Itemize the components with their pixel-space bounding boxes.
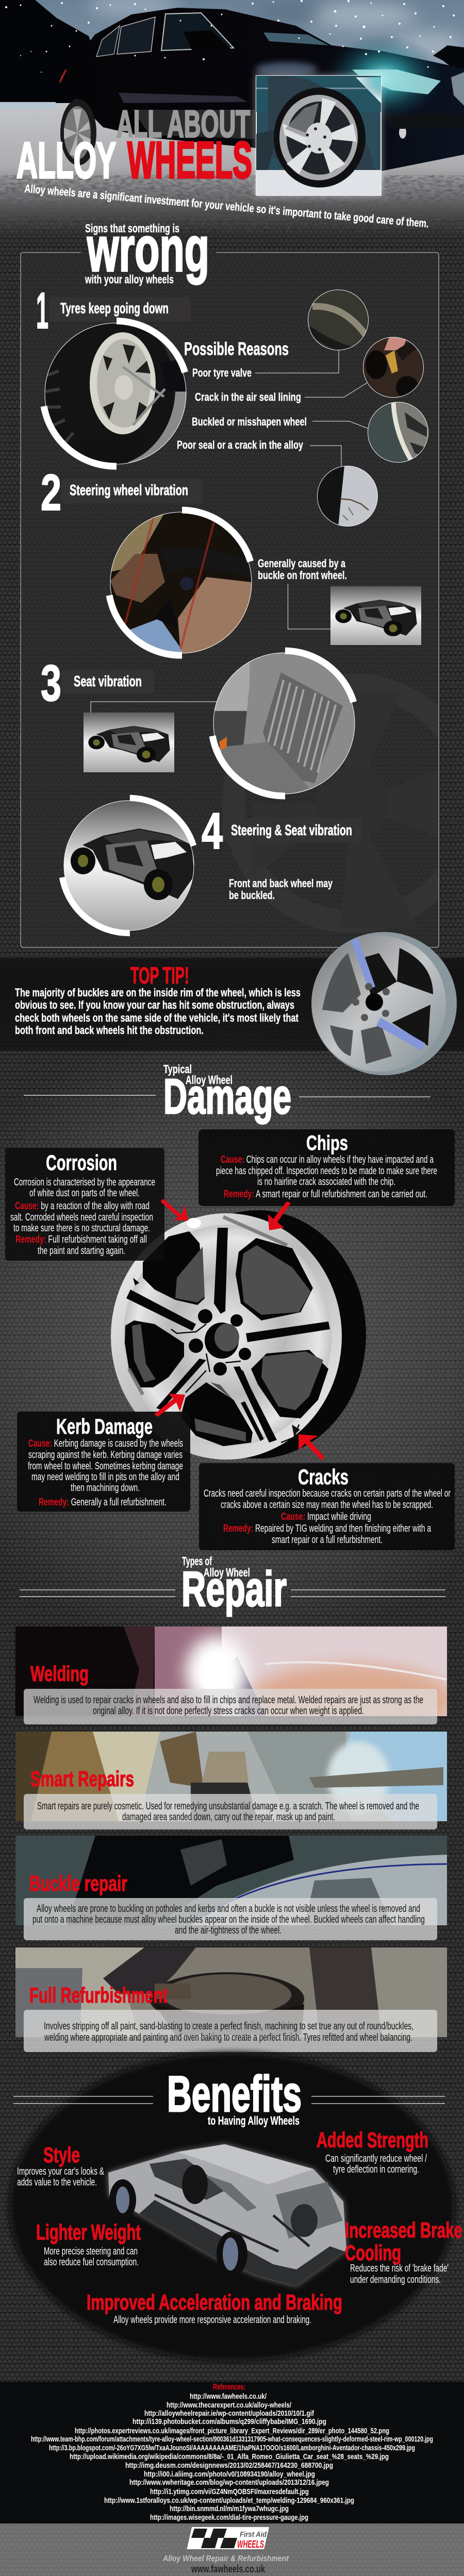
photo: chassis front	[330, 586, 421, 645]
photo: chassis seat	[84, 713, 174, 772]
references list: http://www.1stforalloys.co.uk/wp-content/uploads/et_temp/welding-129684_960x361.jpg	[104, 2496, 354, 2505]
photo: hands on steering wheel	[110, 512, 253, 653]
callout: cracks	[199, 1463, 455, 1550]
smart repairs text box	[24, 1794, 437, 1829]
panel: references	[0, 2382, 464, 2523]
callout: corrosion: to make sure there is no structural damage.	[13, 1223, 150, 1234]
front of car: fog lamp and grille	[382, 72, 464, 139]
headlight	[352, 70, 441, 94]
callout: chips: is no hairline crack associated with the chip.	[257, 1176, 395, 1188]
white arcs	[109, 510, 251, 655]
photo: tyre valve close-up circles	[308, 290, 430, 527]
benefit: improved acceleration and braking: Alloy wheels provide more responsive acceleration and braking.	[113, 2314, 311, 2326]
references list	[31, 2392, 433, 2522]
reasons list with leader lines: Crack in the air seal lining	[195, 391, 301, 403]
footer tagline: Alloy Wheel Repair & Refurbishment	[162, 2554, 289, 2563]
dark disc behind benefits	[9, 2052, 455, 2361]
buckle repair photo	[15, 1836, 447, 1925]
callout: corrosion: the paint and starting again.	[38, 1245, 125, 1257]
step 2 number: 2	[41, 464, 61, 521]
reasons list with leader lines	[177, 350, 369, 466]
benefit: improved acceleration and braking: Improved Acceleration and Braking	[87, 2290, 342, 2314]
callout: corrosion	[5, 1148, 164, 1261]
buckle repair text	[32, 1903, 425, 1936]
arrow: chips	[268, 1201, 291, 1230]
callout: kerb damage: may need welding to fill in pits on the alloy and	[31, 1471, 179, 1483]
callout: kerb damage: from wheel to wheel. Sometimes kerbing damage	[28, 1461, 183, 1472]
callout: kerb damage: Remedy: Generally a full refurbishment.	[39, 1497, 167, 1508]
top tip text: The majority of buckles are on the inside rim of the wheel, which is less	[15, 986, 301, 999]
buckle repair text: and the air-tightness of the wheel.	[175, 1925, 281, 1936]
benefit: style	[17, 2143, 104, 2188]
welding text	[34, 1694, 423, 1717]
step 4 note: be buckled.	[229, 889, 275, 902]
benefit: added strength	[317, 2128, 428, 2175]
step 1 label bar	[49, 297, 191, 321]
callout: corrosion: Corrosion	[46, 1150, 117, 1175]
step 1: tyres keep going down: 1	[36, 282, 48, 339]
references list: http://images.wisegeek.com/dial-tire-pressure-gauge.jpg	[150, 2513, 308, 2522]
callout: cracks: smart repair or a full refurbishment.	[272, 1534, 383, 1546]
step 2 note	[258, 557, 347, 629]
welding photo	[15, 1626, 447, 1716]
reasons list with leader lines: Poor tyre valve	[192, 366, 252, 379]
black window surrounds	[125, 1231, 328, 1446]
callout: cracks: Cracks	[298, 1465, 349, 1489]
step 3 title: Seat vibration	[74, 673, 142, 690]
reasons list with leader lines: Buckled or misshapen wheel	[192, 415, 307, 428]
buckle repair heading: Buckle repair	[29, 1871, 127, 1895]
cracks	[171, 1324, 299, 1443]
rim scratches	[129, 1217, 287, 1395]
benefit: style: Improves your car's looks &	[17, 2166, 104, 2177]
step 2 title: Steering wheel vibration	[70, 482, 188, 499]
callout: kerb damage: scraping against the kerb. Kerbing damage varies	[28, 1449, 183, 1461]
heading: benefits: to Having Alloy Wheels	[208, 2114, 300, 2127]
step 4 note	[229, 877, 333, 902]
white arcs	[212, 651, 354, 796]
full refurbishment photo	[15, 1947, 447, 2037]
spoke stripes	[126, 1228, 330, 1443]
callout: corrosion: salt. Corroded wheels need careful inspection	[10, 1212, 153, 1223]
heading: types of alloy wheel repair: Types of	[182, 1554, 212, 1568]
references list: http://bin.snmmd.nl/m/m1fywa7whugc.jpg	[170, 2504, 289, 2513]
heading: typical alloy wheel damage: Alloy Wheel	[186, 1073, 233, 1087]
welding heading: Welding	[30, 1662, 89, 1686]
panel: buckle repair	[15, 1836, 447, 1940]
benefit: added strength: tyre deflection in cornering.	[333, 2164, 419, 2175]
photo: full chassis	[63, 801, 195, 930]
lit backdrop behind damage wheel	[0, 1020, 464, 1659]
smart repairs photo	[15, 1732, 447, 1821]
panel: welding	[15, 1626, 447, 1724]
heading: typical alloy wheel damage: Damage	[163, 1069, 291, 1124]
callout: corrosion: of white dust on parts of the wheel.	[29, 1188, 140, 1199]
panel: full refurbishment	[15, 1947, 447, 2052]
ghost wheel behind panel	[234, 685, 464, 927]
references list: http://alloywheelrepair.ie/wp-content/uploads/2010/10/1.gif	[144, 2409, 314, 2418]
hero: car photo in the snow	[0, 0, 464, 245]
callout: chips	[198, 1129, 455, 1206]
heading: types of alloy wheel repair: Alloy Wheel	[204, 1566, 250, 1579]
callout: corrosion: Cause: by a reaction of the alloy with road	[15, 1200, 150, 1212]
see-through window parts	[132, 1245, 323, 1442]
heading: signs something is wrong	[85, 214, 209, 286]
footer band	[0, 2523, 464, 2576]
benefit: lighter weight: Lighter Weight	[36, 2220, 141, 2244]
callout: cracks: Cause: Impact while driving	[281, 1511, 371, 1522]
callout: kerb damage: Kerb Damage	[56, 1414, 153, 1438]
step 4 note: Front and back wheel may	[229, 877, 333, 890]
photo: flat tyre	[45, 324, 186, 464]
arrow: kerb damage	[154, 1394, 185, 1417]
benefit: lighter weight: also reduce fuel consumption.	[44, 2257, 139, 2268]
benefit: lighter weight	[36, 2220, 141, 2268]
callout: kerb damage: Cause: Kerbing damage is caused by the wheels	[28, 1438, 183, 1449]
heading: types of alloy wheel repair	[20, 1554, 445, 1617]
smart repairs heading: Smart Repairs	[30, 1767, 134, 1791]
reasons list with leader lines: Poor seal or a crack in the alloy	[177, 438, 304, 451]
callout: kerb damage	[17, 1412, 190, 1512]
benefit: style: adds value to the vehicle.	[17, 2177, 97, 2188]
heading: benefits	[13, 2065, 445, 2127]
top tip wheel	[311, 932, 457, 1075]
references list: http://img.deusm.com/designnews/2013/02/258467/164230_688700.jpg	[125, 2461, 333, 2470]
bolt holes and bore	[189, 1309, 251, 1376]
panel: signs something is wrong	[21, 252, 464, 947]
benefit: style: Style	[43, 2143, 80, 2167]
references list: http://www.thecarexpert.co.uk/alloy-wheels/	[167, 2401, 292, 2410]
top tip heading: TOP TIP!	[130, 962, 189, 989]
step 3: seat vibration	[41, 651, 355, 804]
buckle repair text box	[24, 1898, 437, 1940]
benefit: lighter weight: More precise steering and can	[44, 2246, 138, 2257]
title: ALL ABOUT	[117, 103, 250, 145]
heading: typical alloy wheel damage: Typical	[163, 1062, 192, 1076]
full refurbishment text box	[24, 2010, 437, 2052]
step 1 title: Tyres keep going down	[60, 300, 169, 317]
heading: signs something is wrong: Signs that something is	[85, 222, 179, 235]
callout: chips: Chips	[306, 1132, 348, 1155]
callout: kerb damage: then machining down.	[71, 1482, 140, 1494]
benefit: improved acceleration and braking	[87, 2290, 342, 2326]
car body	[59, 8, 464, 172]
full refurbishment text	[44, 2021, 413, 2043]
callout: corrosion: Remedy: Full refurbishment taking off all	[15, 1234, 147, 1245]
panel: top tip band	[0, 958, 464, 1051]
step 4 number: 4	[202, 802, 223, 859]
benefit: increased brake cooling	[345, 2218, 462, 2285]
heading: typical alloy wheel damage	[24, 1062, 430, 1124]
rear wheel	[60, 99, 96, 165]
callout: corrosion: Corrosion is characterised by the appearance	[14, 1177, 155, 1188]
panel: smart repairs	[15, 1732, 447, 1829]
photo: car seat	[213, 653, 355, 804]
step 3 number: 3	[41, 654, 61, 711]
step 4 title: Steering & Seat vibration	[231, 822, 352, 839]
snow dots	[5, 0, 455, 73]
damaged alloy wheel	[111, 1210, 366, 1460]
smart repairs text: damaged area sanded down, carry out the repair, mask up and paint.	[122, 1811, 335, 1823]
possible reasons heading: Possible Reasons	[184, 339, 289, 359]
top tip text: both front and back wheels hit the obstruction.	[15, 1024, 204, 1037]
footer website: www.fawheels.co.uk	[191, 2564, 266, 2575]
inset photo: wheel close-up	[251, 71, 386, 200]
benefit: increased brake cooling: Cooling	[345, 2241, 401, 2265]
references heading: References:	[213, 2383, 245, 2392]
step 3 label bar	[61, 670, 154, 693]
heading: signs something is wrong: with your alloy wheels	[85, 273, 174, 286]
heading: benefits: Benefits	[167, 2065, 302, 2122]
title	[16, 103, 252, 189]
references list: http://i00.i.aliimg.com/photo/v0/108934190/alloy_wheel.jpg	[144, 2470, 315, 2479]
smart repairs text	[37, 1801, 419, 1823]
step 4: steering and seat vibration	[62, 798, 362, 933]
illustration: silver car cutaway	[108, 2144, 346, 2286]
step 2: steering wheel vibration	[41, 464, 253, 655]
step 2 note: buckle on front wheel.	[258, 569, 347, 582]
arrow: cracks	[299, 1434, 325, 1460]
logo: first aid wheels	[187, 2527, 269, 2550]
white arcs	[44, 321, 185, 466]
references list: http://www.vwheritage.com/blog/wp-content/uploads/2013/12/16.jpeg	[129, 2478, 329, 2487]
welding text box	[24, 1689, 437, 1724]
heading: signs something is wrong: wrong	[87, 214, 209, 285]
top tip text	[15, 986, 301, 1037]
step 2 label bar	[61, 479, 203, 503]
logo: first aid wheels: First Aid	[240, 2530, 267, 2539]
white arcs	[62, 798, 193, 933]
step 1: tyres keep going down	[36, 282, 191, 469]
heading: types of alloy wheel repair: Repair	[181, 1562, 287, 1617]
title: ALLOY	[16, 132, 116, 189]
references list: http://i139.photobucket.com/albums/q299/cliffybabe/IMG_1690.jpg	[132, 2417, 326, 2426]
references list: http://www.fawheels.co.uk/	[190, 2392, 267, 2401]
top tip text: check both wheels on the same side of the vehicle, it's most likely that	[15, 1011, 299, 1024]
logo: first aid wheels: WHEELS	[237, 2539, 264, 2550]
top tip text: obvious to see. If you know your car has hit some obstruction, always	[15, 998, 294, 1011]
step 2 note: Generally caused by a	[258, 557, 346, 570]
references list: http://i1.ytimg.com/vi/GZ4NmQOBSFI/maxresdefault.jpg	[150, 2487, 309, 2496]
title: WHEELS	[127, 131, 252, 189]
step 4 label bar	[223, 818, 362, 842]
full refurbishment heading: Full Refurbishment	[29, 1983, 168, 2007]
arrow: corrosion	[160, 1199, 188, 1221]
